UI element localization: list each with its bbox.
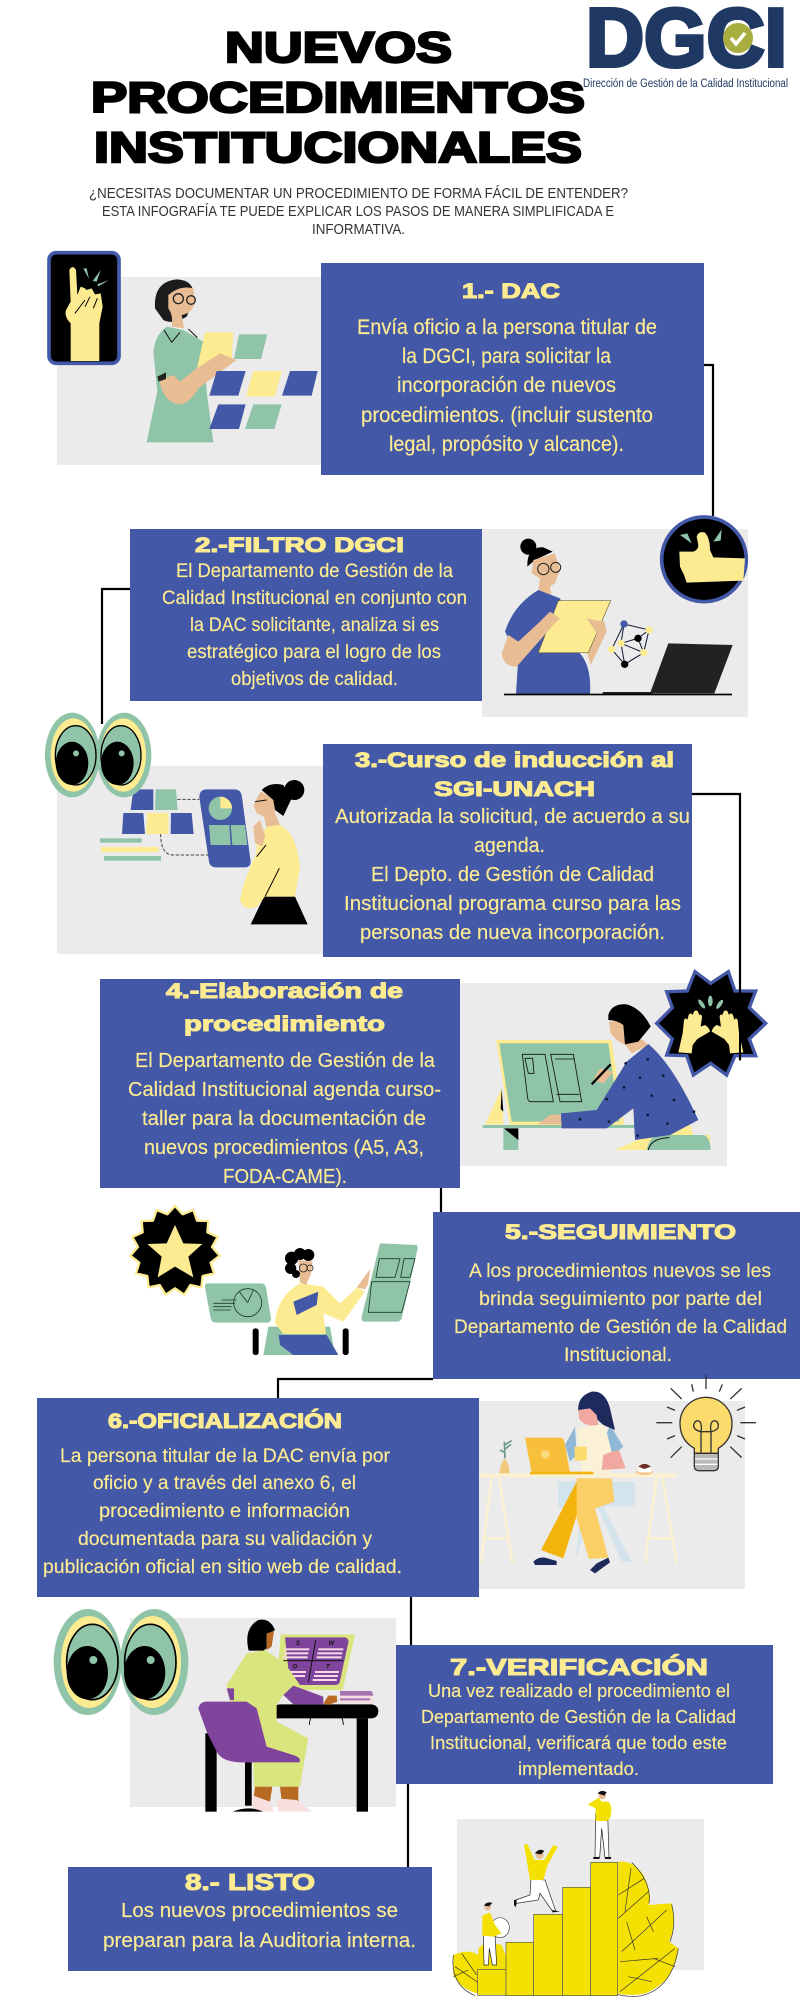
body: step 7: Institucional, verificará que todo este: [430, 1732, 727, 1753]
icon: light bulb: [656, 1375, 756, 1471]
figure: person jumping: [514, 1844, 560, 1912]
body: step 4: [128, 1049, 441, 1188]
heading: step 3: SGI-UNACH: [434, 778, 595, 801]
heading: step 4: [166, 980, 403, 1036]
panel: step 7 Verificacion: [396, 1645, 773, 1784]
illustration 7: woman at computer: T: [326, 1664, 331, 1670]
body: step 1: legal, propósito y alcance).: [389, 433, 624, 456]
body: step 4: Calidad Institucional agenda curso-: [128, 1078, 441, 1101]
body: step 8: preparan para la Auditoria interna.: [103, 1929, 416, 1952]
body: step 2: objetivos de calidad.: [231, 668, 398, 690]
illustration 8: people climbing yellow steps: [453, 1791, 704, 1996]
body: step 4: FODA-CAME).: [223, 1165, 347, 1188]
body: step 6: procedimiento e información: [99, 1500, 350, 1522]
intro text: ESTA INFOGRAFÍA TE PUEDE EXPLICAR LOS PASOS DE MANERA SIMPLIFICADA E: [102, 203, 614, 220]
body: step 6: La persona titular de la DAC envía por: [60, 1445, 390, 1467]
heading: step 2: 2.-FILTRO DGCI: [195, 534, 404, 557]
heading: step 4: procedimiento: [184, 1013, 385, 1036]
body: step 7: implementado.: [518, 1758, 639, 1779]
intro text: ¿NECESITAS DOCUMENTAR UN PROCEDIMIENTO DE FORMA FÁCIL DE ENTENDER?: [89, 185, 628, 202]
body: step 2: El Departamento de Gestión de la: [176, 560, 453, 582]
panel: step 4 Elaboracion de procedimiento: [100, 979, 460, 1188]
body: step 1: incorporación de nuevos: [397, 374, 616, 397]
figure: person carrying vase: [482, 1902, 509, 1965]
connector 1 to 2: [704, 365, 713, 516]
body: step 1: Envía oficio a la persona titular de: [357, 316, 657, 339]
panel: step 8 Listo: [68, 1867, 432, 1971]
connector 3 to 4: [692, 794, 740, 1060]
connector 2 to 3: [102, 589, 130, 724]
body: step 8: Los nuevos procedimientos se: [121, 1899, 398, 1922]
heading: step 3: [355, 749, 674, 801]
body: step 8: [103, 1899, 416, 1952]
body: step 3: El Depto. de Gestión de Calidad: [371, 863, 654, 886]
heading: step 6: 6.-OFICIALIZACIÓN: [108, 1409, 342, 1433]
panel: step 5 Seguimiento: [433, 1212, 800, 1379]
illustration 1: woman with tablet: [49, 253, 323, 465]
heading: step 3: 3.-Curso de inducción al: [355, 749, 674, 772]
illustration 7: woman at computer: W: [329, 1641, 336, 1647]
heading: step 7: 7.-VERIFICACIÓN: [450, 1653, 708, 1680]
body: step 2: estratégico para el logro de los: [187, 641, 441, 663]
icon: thumbs up: [662, 517, 746, 602]
illustration 6: woman at desk with bulb: [478, 1375, 756, 1589]
body: step 7: Una vez realizado el procedimiento el: [428, 1680, 730, 1701]
connector 5 to 6: [278, 1379, 433, 1398]
body: step 3: personas de nueva incorporación.: [360, 921, 665, 944]
body: step 7: Departamento de Gestión de la Calidad: [421, 1706, 736, 1727]
title: INSTITUCIONALES: [94, 124, 582, 172]
body: step 1: procedimientos. (incluir sustento: [361, 404, 653, 427]
body: step 6: [43, 1445, 402, 1578]
illustration 7: woman at computer: O: [292, 1664, 297, 1670]
panel: step 3 Curso de induccion: [323, 744, 692, 957]
body: step 2: Calidad Institucional en conjunto con: [162, 587, 467, 609]
icon: pointing finger: [49, 253, 119, 363]
body: step 6: oficio y a través del anexo 6, el: [93, 1472, 356, 1494]
body: step 7: [421, 1680, 736, 1779]
body: step 6: publicación oficial en sitio web de calidad.: [43, 1556, 402, 1578]
illustration 3: woman with tablet diagram: [57, 766, 323, 954]
body: step 1: [357, 316, 657, 456]
illustration 7: woman at computer: [54, 1609, 396, 1812]
panel: step 1 DAC: [321, 263, 704, 475]
body: step 5: A los procedimientos nuevos se les: [469, 1260, 771, 1282]
body: step 5: brinda seguimiento por parte del: [479, 1288, 762, 1310]
body: step 3: agenda.: [474, 834, 545, 857]
body: step 2: la DAC solicitante, analiza si es: [190, 614, 439, 636]
panel: step 6 Oficializacion: [37, 1398, 479, 1597]
body: step 5: Institucional.: [564, 1344, 672, 1366]
heading: step 4: 4.-Elaboración de: [166, 980, 403, 1003]
icon: eyes (step 3): [45, 713, 151, 797]
connector 6 to 7: [410, 1597, 412, 1646]
title: [91, 24, 585, 172]
heading: step 5: 5.-SEGUIMIENTO: [505, 1221, 736, 1244]
illustration 4: woman drawing on board: [460, 965, 766, 1166]
heading: step 8: 8.- LISTO: [185, 1869, 315, 1895]
title: NUEVOS: [225, 24, 452, 72]
icon: star badge: [130, 1206, 220, 1295]
body: step 4: nuevos procedimientos (A5, A3,: [144, 1136, 424, 1159]
intro text: [89, 185, 628, 238]
illustration 5: person presenting with star badge: [130, 1206, 418, 1355]
body: step 3: Institucional programa curso para las: [344, 892, 681, 915]
illustration 7: woman at computer: S: [296, 1641, 300, 1647]
panel: step 2 Filtro DGCI: [130, 529, 482, 701]
body: step 4: El Departamento de Gestión de la: [135, 1049, 436, 1072]
heading: step 1: 1.- DAC: [462, 280, 560, 303]
connector 7 to 8: [407, 1784, 409, 1867]
body: step 2: [162, 560, 467, 690]
illustration 2: woman with clipboard and laptop: [482, 517, 748, 717]
title: PROCEDIMIENTOS: [91, 74, 585, 122]
body: step 3: Autorizada la solicitud, de acuerdo a su: [335, 805, 690, 828]
body: step 5: Departamento de Gestión de la Calidad: [454, 1316, 787, 1338]
body: step 6: documentada para su validación y: [78, 1528, 372, 1550]
body: step 5: [454, 1260, 787, 1366]
icon: burst with hands: [657, 965, 766, 1075]
body: step 3: [335, 805, 690, 944]
intro text: INFORMATIVA.: [312, 221, 405, 238]
icon: eyes (step 7): [54, 1609, 188, 1715]
body: step 1: la DGCI, para solicitar la: [402, 345, 611, 368]
body: step 4: taller para la documentación de: [142, 1107, 426, 1130]
connector 4 to 5: [440, 1188, 442, 1213]
figure: person on top: [588, 1791, 611, 1859]
